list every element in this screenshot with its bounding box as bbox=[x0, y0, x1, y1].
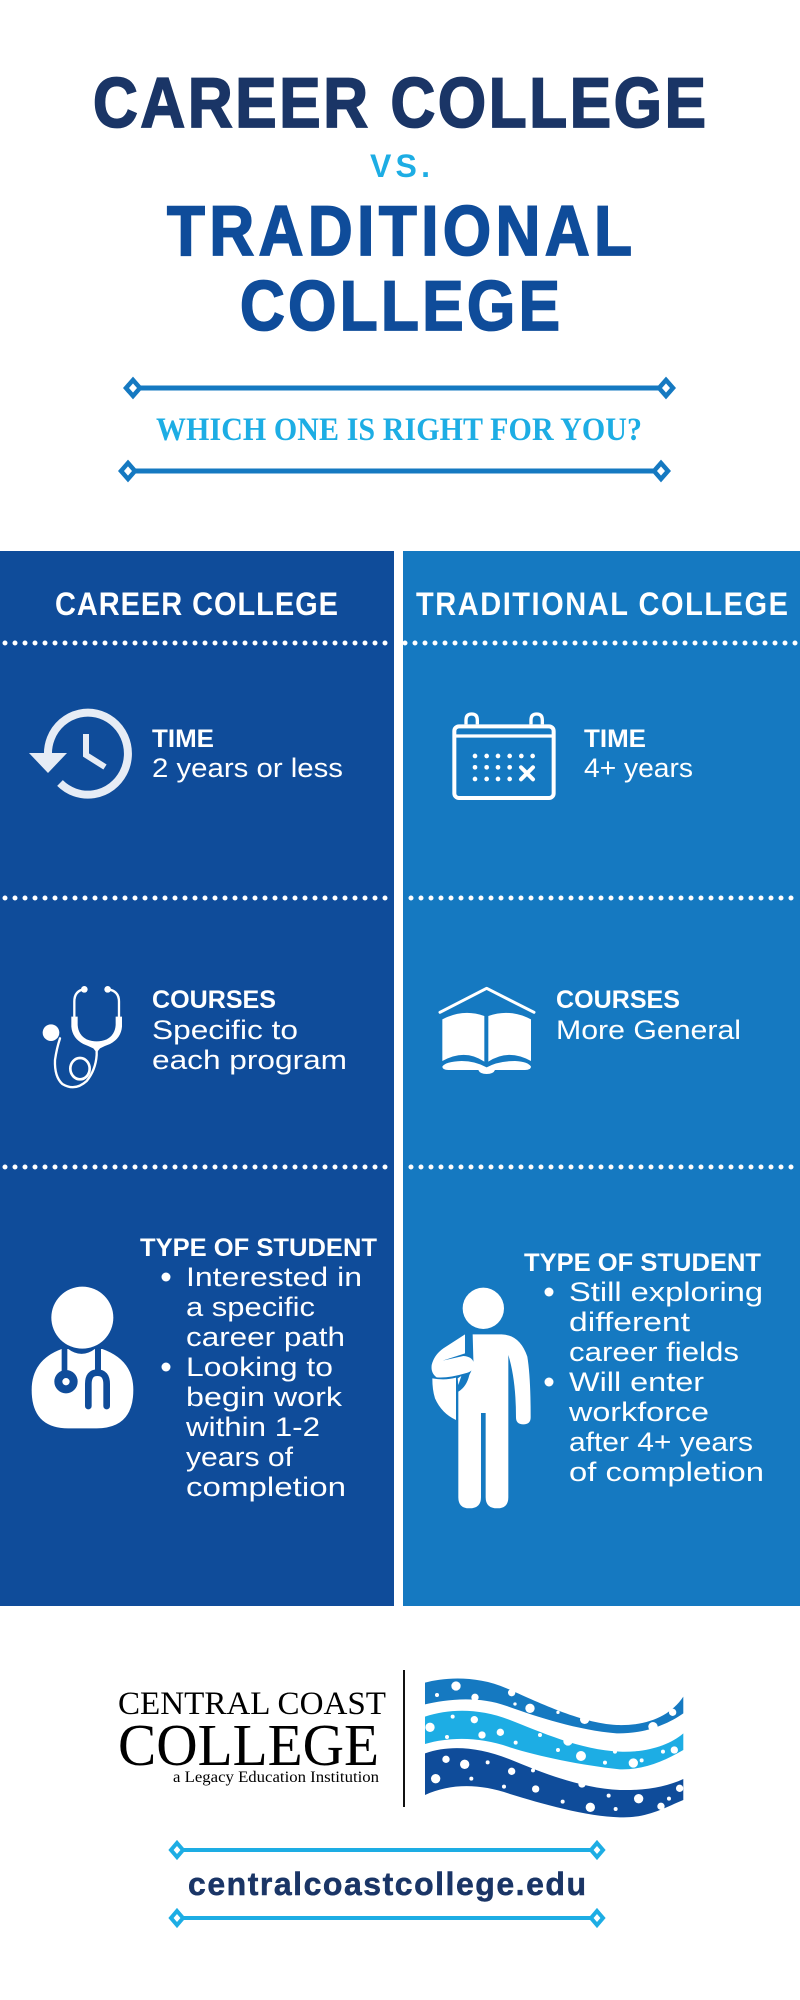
text: type of student: Will enter bbox=[569, 1367, 704, 1397]
text: time: 2 years or less bbox=[152, 753, 343, 783]
icon: doctor bbox=[32, 1287, 133, 1428]
top divider with diamonds bbox=[126, 380, 673, 396]
text: type of student: TYPE OF STUDENT bbox=[524, 1249, 761, 1277]
title bbox=[93, 64, 706, 346]
logo: waves with dots bbox=[425, 1678, 683, 1817]
text: type of student: workforce bbox=[568, 1397, 709, 1427]
text: type of student: different bbox=[569, 1307, 691, 1337]
text: time: TIME bbox=[152, 725, 214, 753]
website url: centralcoastcollege.edu bbox=[188, 1866, 586, 1902]
panel: traditional college bbox=[403, 551, 800, 1606]
logo: central coast college wordmark: CENTRAL COAST bbox=[118, 1686, 386, 1722]
heading: traditional college: TRADITIONAL COLLEGE bbox=[416, 585, 788, 622]
text: type of student: Looking to bbox=[186, 1352, 333, 1382]
text: type of student: Still exploring bbox=[569, 1277, 763, 1307]
footer top divider bbox=[171, 1843, 603, 1857]
icon: calendar bbox=[454, 714, 554, 798]
logo: central coast college wordmark bbox=[118, 1686, 386, 1786]
text: type of student: TYPE OF STUDENT bbox=[140, 1234, 377, 1262]
title line: traditional: TRADITIONAL bbox=[167, 192, 632, 271]
text: courses: COURSES bbox=[152, 986, 276, 1014]
text: courses: COURSES bbox=[556, 986, 680, 1014]
icon: book with roof bbox=[440, 988, 534, 1074]
text: type of student: a specific bbox=[186, 1292, 315, 1322]
title line: college: COLLEGE bbox=[240, 267, 560, 346]
text: courses bbox=[556, 986, 741, 1045]
text: type of student: years of bbox=[186, 1442, 294, 1472]
text: type of student: after 4+ years bbox=[569, 1427, 753, 1457]
text: courses bbox=[152, 986, 347, 1075]
text: time: 4+ years bbox=[584, 753, 693, 783]
text: type of student: career path bbox=[186, 1322, 345, 1352]
logo: central coast college wordmark: COLLEGE bbox=[118, 1712, 379, 1778]
text: type of student: completion bbox=[186, 1472, 346, 1502]
heading: career college: CAREER COLLEGE bbox=[55, 585, 338, 622]
icon: clock with back arrow bbox=[29, 713, 128, 795]
panel: career college bbox=[0, 551, 394, 1606]
logo divider bbox=[403, 1670, 405, 1807]
title line: career college: CAREER COLLEGE bbox=[93, 64, 706, 143]
text: type of student: within 1-2 bbox=[185, 1412, 320, 1442]
title line: vs.: VS. bbox=[370, 148, 430, 184]
text: courses: each program bbox=[152, 1045, 347, 1075]
text: type of student: career fields bbox=[569, 1337, 739, 1367]
icon: stethoscope bbox=[43, 986, 122, 1087]
text: time: TIME bbox=[584, 725, 646, 753]
text: courses: More General bbox=[556, 1015, 741, 1045]
text: time bbox=[584, 725, 693, 783]
footer bottom divider bbox=[171, 1911, 603, 1925]
text: courses: Specific to bbox=[152, 1015, 298, 1045]
text: type of student: of completion bbox=[569, 1457, 764, 1487]
subtitle: WHICH ONE IS RIGHT FOR YOU? bbox=[156, 411, 642, 447]
logo: central coast college wordmark: a Legacy Education Institution bbox=[173, 1769, 379, 1786]
second divider with diamonds bbox=[121, 463, 668, 479]
text: type of student bbox=[140, 1234, 377, 1502]
text: type of student bbox=[524, 1249, 764, 1487]
text: type of student: Interested in bbox=[186, 1262, 362, 1292]
text: time bbox=[152, 725, 343, 783]
icon: student with backpack bbox=[432, 1288, 531, 1508]
text: type of student: begin work bbox=[186, 1382, 343, 1412]
